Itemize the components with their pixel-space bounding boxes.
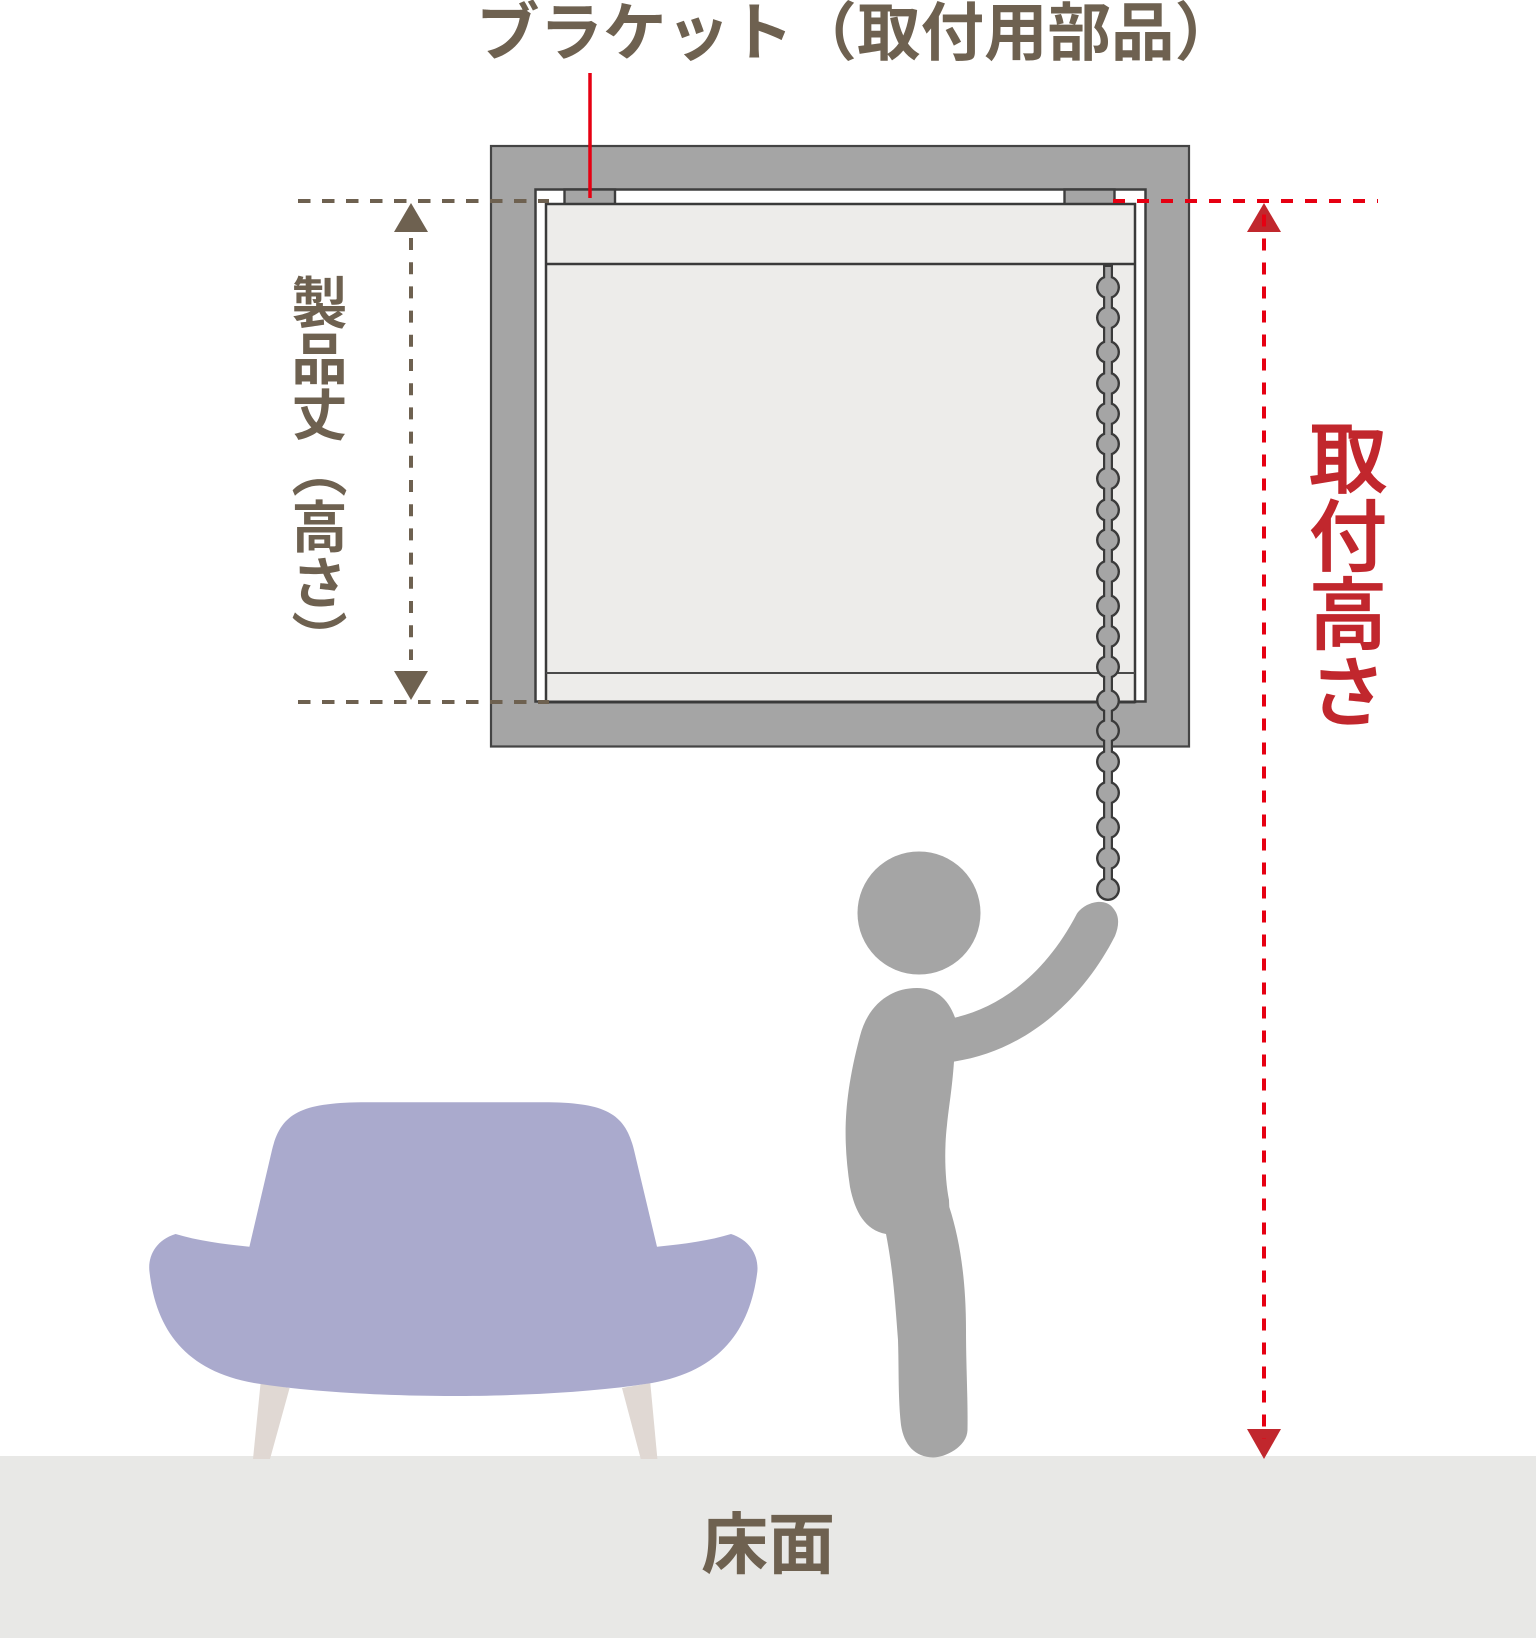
product height arrow	[394, 203, 428, 700]
sofa	[149, 1102, 758, 1459]
window recess	[536, 190, 1146, 702]
label: mounting height: 取付高さ	[1298, 418, 1386, 730]
ball chain	[1096, 265, 1120, 901]
title: bracket label: ブラケット（取付用部品）	[476, 0, 1238, 69]
wall opening frame	[491, 146, 1189, 746]
roller blind	[546, 204, 1135, 702]
product height guide lines	[298, 201, 549, 702]
person	[846, 852, 1118, 1458]
label: floor: 床面	[701, 1508, 835, 1583]
bracket leader line	[588, 73, 592, 198]
mounting height arrow	[1113, 201, 1378, 1459]
floor	[0, 1456, 1536, 1638]
brackets	[564, 190, 1114, 204]
label: product height: 製品丈（高さ）	[284, 274, 347, 666]
